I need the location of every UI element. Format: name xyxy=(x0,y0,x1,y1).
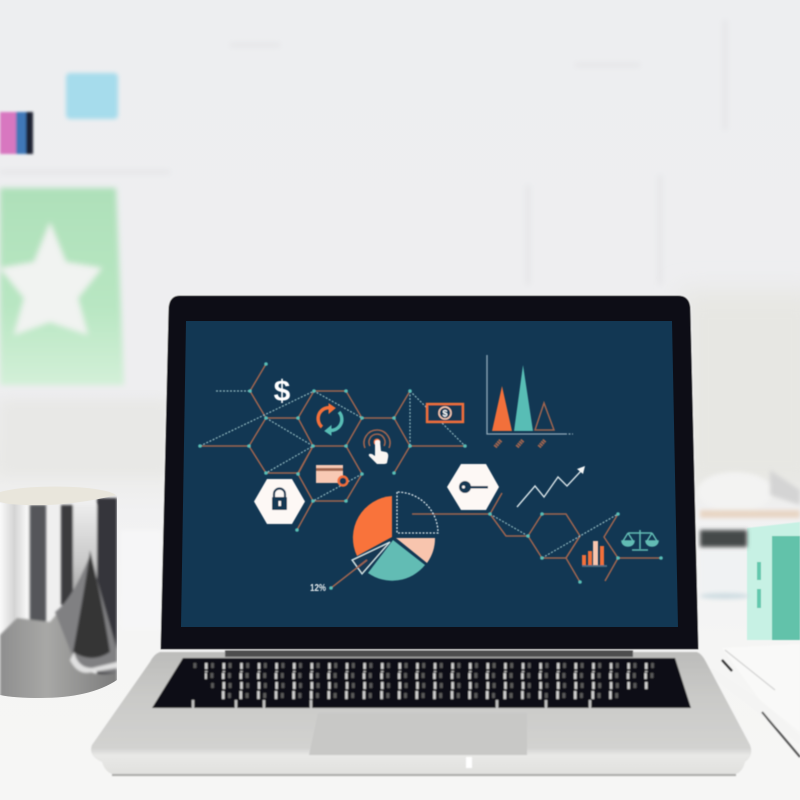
percent leader line xyxy=(331,560,367,588)
icon: touch hand xyxy=(364,430,390,464)
screen graphics xyxy=(198,355,663,594)
dotted connector lines xyxy=(200,391,618,558)
teal box xyxy=(747,522,800,640)
icon: mini bar chart xyxy=(582,541,607,567)
icon: refresh arrows xyxy=(318,404,342,435)
pie slice: teal xyxy=(368,540,425,581)
percent label: 12% xyxy=(310,583,326,594)
trend arrow xyxy=(517,466,585,507)
icon: padlock hexagon xyxy=(254,479,305,524)
striped colour swatch xyxy=(0,112,33,154)
icon: banknote: $ xyxy=(442,408,448,418)
notebook behind laptop xyxy=(697,470,800,599)
pie slice: outlined triangle xyxy=(352,542,390,574)
laptop bezel xyxy=(160,295,699,650)
icon: banknote xyxy=(427,404,463,422)
green star poster xyxy=(0,188,124,385)
hexagon network lines xyxy=(200,364,661,582)
coffee mug xyxy=(0,486,120,705)
icon: dollar sign: $ xyxy=(274,375,291,408)
pie slice: orange xyxy=(353,496,392,556)
trackpad xyxy=(309,713,527,755)
pie chart xyxy=(329,492,438,590)
pie slice: dashed quarter xyxy=(397,492,438,533)
front notch xyxy=(466,757,472,768)
icon: balance scale xyxy=(622,530,658,550)
laptop base xyxy=(91,645,751,775)
pie slice: peach xyxy=(396,538,435,563)
papers xyxy=(704,644,800,757)
icon: credit card with coin xyxy=(316,465,348,486)
network nodes xyxy=(198,362,663,584)
icon: key hexagon xyxy=(447,464,499,510)
blue sticky note xyxy=(66,73,118,119)
laptop screen xyxy=(181,321,678,627)
hinge xyxy=(225,645,633,657)
keyboard xyxy=(152,658,691,708)
triangle bar chart xyxy=(487,355,573,447)
